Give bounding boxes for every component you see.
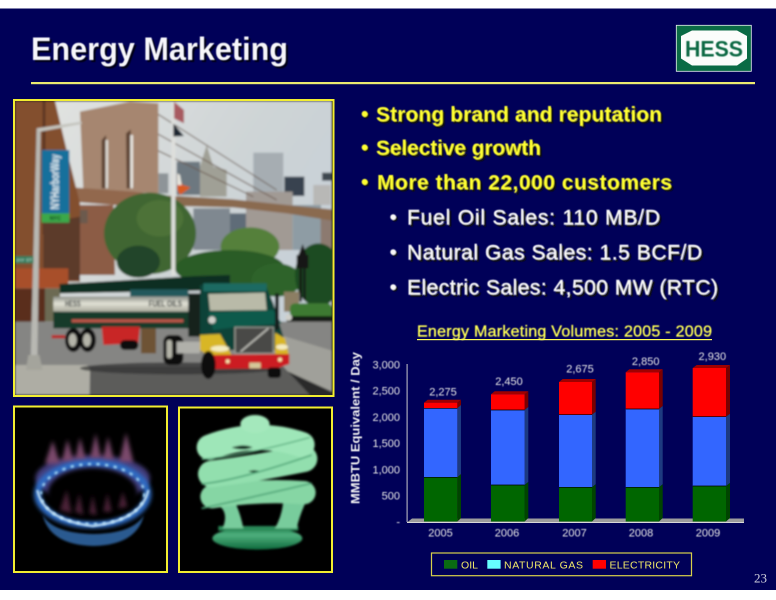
bar total labels: 2,450 — [495, 376, 523, 388]
photo: Hess fuel truck below Brooklyn Bridge: JAY ST — [16, 257, 32, 263]
photo: gas flame ring — [14, 406, 167, 572]
sub-bullet: fuel oil: Fuel Oil Sales: 110 MB/D — [407, 206, 660, 229]
photo: compact fluorescent bulb — [179, 408, 332, 572]
lower burner reflection — [43, 515, 144, 546]
rear wheels — [65, 328, 138, 352]
legend: oil: OIL — [461, 560, 478, 572]
sub-bullet: natural gas: • — [391, 242, 398, 266]
legend: natural gas: NATURAL GAS — [504, 560, 583, 572]
x axis labels: 2008 — [629, 528, 653, 540]
flag pole and flags — [171, 102, 175, 276]
bar 2005 — [424, 400, 461, 522]
photo: Hess fuel truck below Brooklyn Bridge: NYHarborWay — [48, 154, 62, 209]
y axis labels — [372, 360, 400, 528]
bulb base — [212, 527, 302, 550]
bar total labels: 2,850 — [632, 356, 659, 368]
bullet: selective growth: • — [362, 138, 370, 161]
brick building — [15, 101, 80, 282]
sub-bullet: fuel oil: • — [391, 208, 398, 230]
sub-bullet: electric: • — [390, 276, 397, 299]
x axis labels: 2005 — [428, 528, 453, 540]
bar 2007 — [559, 379, 596, 522]
hedge and fence — [290, 303, 332, 320]
x axis labels: 2006 — [495, 528, 519, 540]
photo: Hess fuel truck below Brooklyn Bridge: HESS — [65, 299, 81, 309]
banner — [42, 150, 69, 214]
sub-bullet: electric: • — [391, 278, 398, 300]
ground — [15, 322, 332, 395]
chart legend — [432, 553, 692, 576]
bar total labels: 2,930 — [699, 351, 726, 363]
logo: Hess: HESS — [685, 36, 743, 62]
bullet: selective growth: Selective growth — [378, 139, 543, 162]
bar total labels: 2,675 — [566, 364, 594, 376]
bullet: selective growth: Selective growth — [376, 137, 541, 160]
y axis title: MMBTU Equivalent / Day — [348, 352, 362, 504]
bullet: strong brand: • — [362, 104, 370, 128]
title: Energy Marketing — [33, 33, 290, 69]
x axis labels: 2009 — [696, 528, 720, 540]
spiral bands — [209, 438, 304, 497]
suspension cables — [157, 113, 277, 200]
sub-bullet: electric: Electric Sales: 4,500 MW (RTC) — [409, 278, 720, 301]
y axis labels: 2,500 — [372, 386, 400, 398]
bullet: strong brand: • — [361, 103, 368, 126]
inner reflected flames — [60, 490, 127, 515]
bar total labels: 2,275 — [429, 386, 457, 398]
spiral shadow gaps — [232, 445, 253, 449]
street lamp pole — [31, 128, 41, 360]
legend: electricity: ELECTRICITY — [610, 560, 680, 572]
sub-bullet: electric: Electric Sales: 4,500 MW (RTC) — [407, 276, 718, 299]
y axis labels: 3,000 — [372, 360, 400, 372]
bulb legs — [215, 498, 243, 528]
x axis labels — [428, 528, 720, 540]
bar total labels — [429, 351, 726, 398]
bright flame cones — [41, 464, 144, 524]
photo: Hess fuel truck below Brooklyn Bridge: FUEL OILS — [149, 299, 182, 309]
x axis labels: 2007 — [562, 528, 587, 540]
glowing flame ring — [38, 463, 148, 525]
bar 2006 — [491, 391, 528, 522]
bridge tower — [80, 102, 158, 193]
sub-bullet: natural gas: Natural Gas Sales: 1.5 BCF/D — [407, 241, 702, 264]
bar 2009 — [693, 365, 730, 522]
bullet: selective growth: • — [361, 136, 368, 160]
photo: Hess fuel truck below Brooklyn Bridge: NYC — [50, 216, 61, 222]
bullet list — [361, 103, 720, 301]
lamp post right — [297, 244, 308, 302]
bullet: customers: • — [362, 172, 370, 196]
sub-bullet: natural gas: Natural Gas Sales: 1.5 BCF/D — [409, 243, 704, 266]
y axis labels: 2,000 — [372, 412, 400, 424]
bullet: customers: More than 22,000 customers — [377, 171, 672, 194]
bullet: strong brand: Strong brand and reputation — [378, 106, 664, 128]
bridge deck — [177, 196, 332, 221]
page number: 23 — [754, 570, 767, 586]
bar 2008 — [626, 369, 663, 522]
title: Energy Marketing — [31, 31, 288, 67]
y axis labels: - — [396, 516, 400, 528]
tanker trailer — [59, 275, 230, 293]
street sign — [15, 256, 33, 263]
y axis labels: 1,000 — [372, 464, 400, 476]
logo: Hess — [676, 25, 751, 71]
axis and floor — [406, 364, 408, 522]
stacked bar chart — [348, 351, 744, 540]
legend: oil — [444, 560, 478, 572]
bullet: strong brand: Strong brand and reputation — [376, 104, 662, 127]
photo: Hess fuel truck below Brooklyn Bridge — [14, 100, 342, 396]
cab — [163, 283, 292, 379]
sub-bullet: fuel oil: • — [390, 206, 397, 229]
bullet: customers: More than 22,000 customers — [379, 173, 674, 196]
trees — [104, 193, 196, 274]
y axis labels: 500 — [382, 490, 400, 502]
sub-bullet: natural gas: • — [390, 241, 397, 264]
chart title: Energy Marketing Volumes: 2005 - 2009 — [417, 324, 712, 340]
distant skyline — [177, 162, 200, 195]
sub-bullet: fuel oil: Fuel Oil Sales: 110 MB/D — [409, 208, 662, 231]
y axis labels: 1,500 — [372, 438, 400, 450]
bullet: customers: • — [361, 171, 368, 194]
outer violet flame tips — [35, 433, 150, 502]
